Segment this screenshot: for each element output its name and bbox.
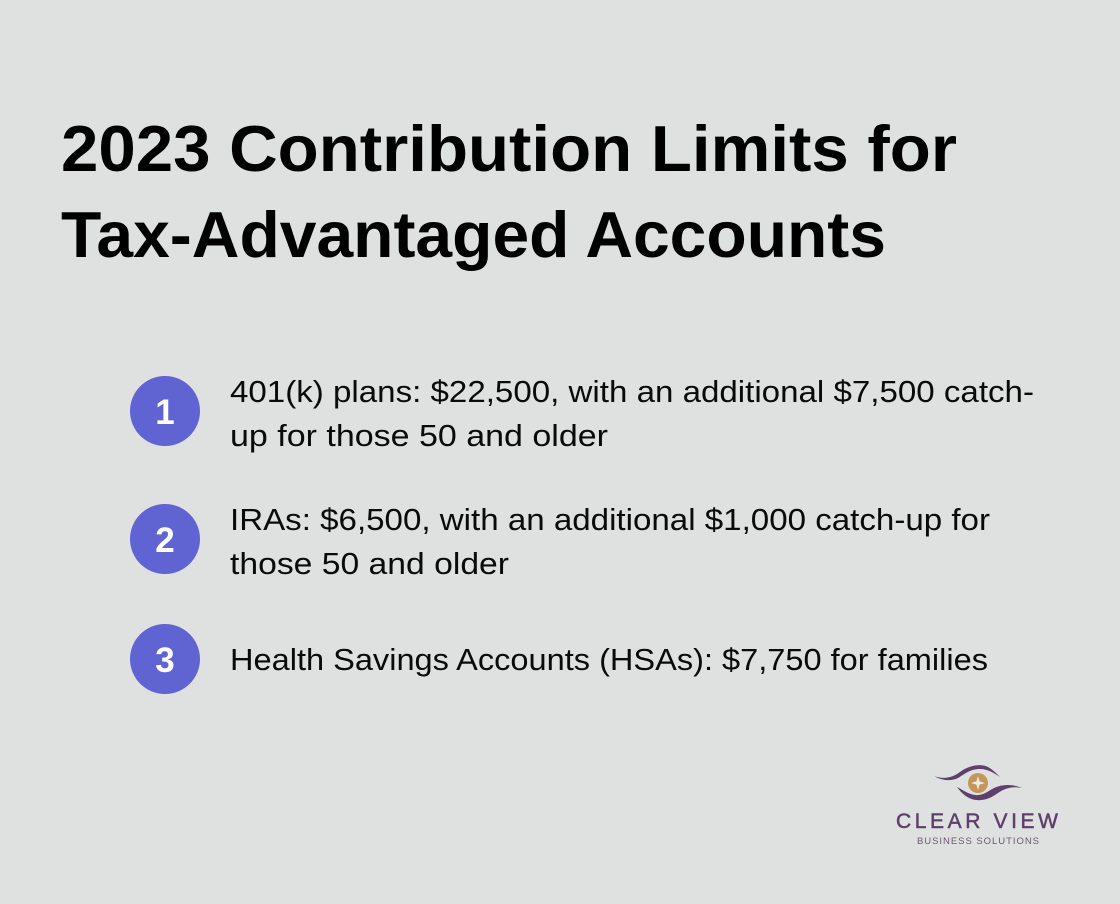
number badge 1: 1 [155,393,175,432]
item 1 text: up for those 50 and older [230,418,608,453]
item 3 text: Health Savings Accounts (HSAs): $7,750 for families [230,642,988,677]
title: 2023 Contribution Limits for [61,112,957,185]
number badge 3: 3 [155,641,175,680]
icon: eye with star [934,765,1022,800]
number badge 2: 2 [155,521,175,560]
title: Tax-Advantaged Accounts [61,198,886,271]
item 2 text [230,502,990,581]
item 2 text: those 50 and older [230,546,509,581]
logo: Clear View Business Solutions [896,765,1058,847]
title [61,112,957,271]
item 1 text: 401(k) plans: $22,500, with an additional $7,500 catch- [230,374,1034,409]
list item 3 [130,624,988,694]
number badge 3 [130,624,200,694]
list item 2 [130,502,990,581]
item 2 text: IRAs: $6,500, with an additional $1,000 catch-up for [230,502,990,537]
list item 1 [130,374,1034,453]
number badge 1 [130,376,200,446]
number badge 2 [130,504,200,574]
item 1 text [230,374,1034,453]
logo tagline: BUSINESS SOLUTIONS [917,836,1039,847]
logo wordmark: CLEAR VIEW [896,810,1058,833]
